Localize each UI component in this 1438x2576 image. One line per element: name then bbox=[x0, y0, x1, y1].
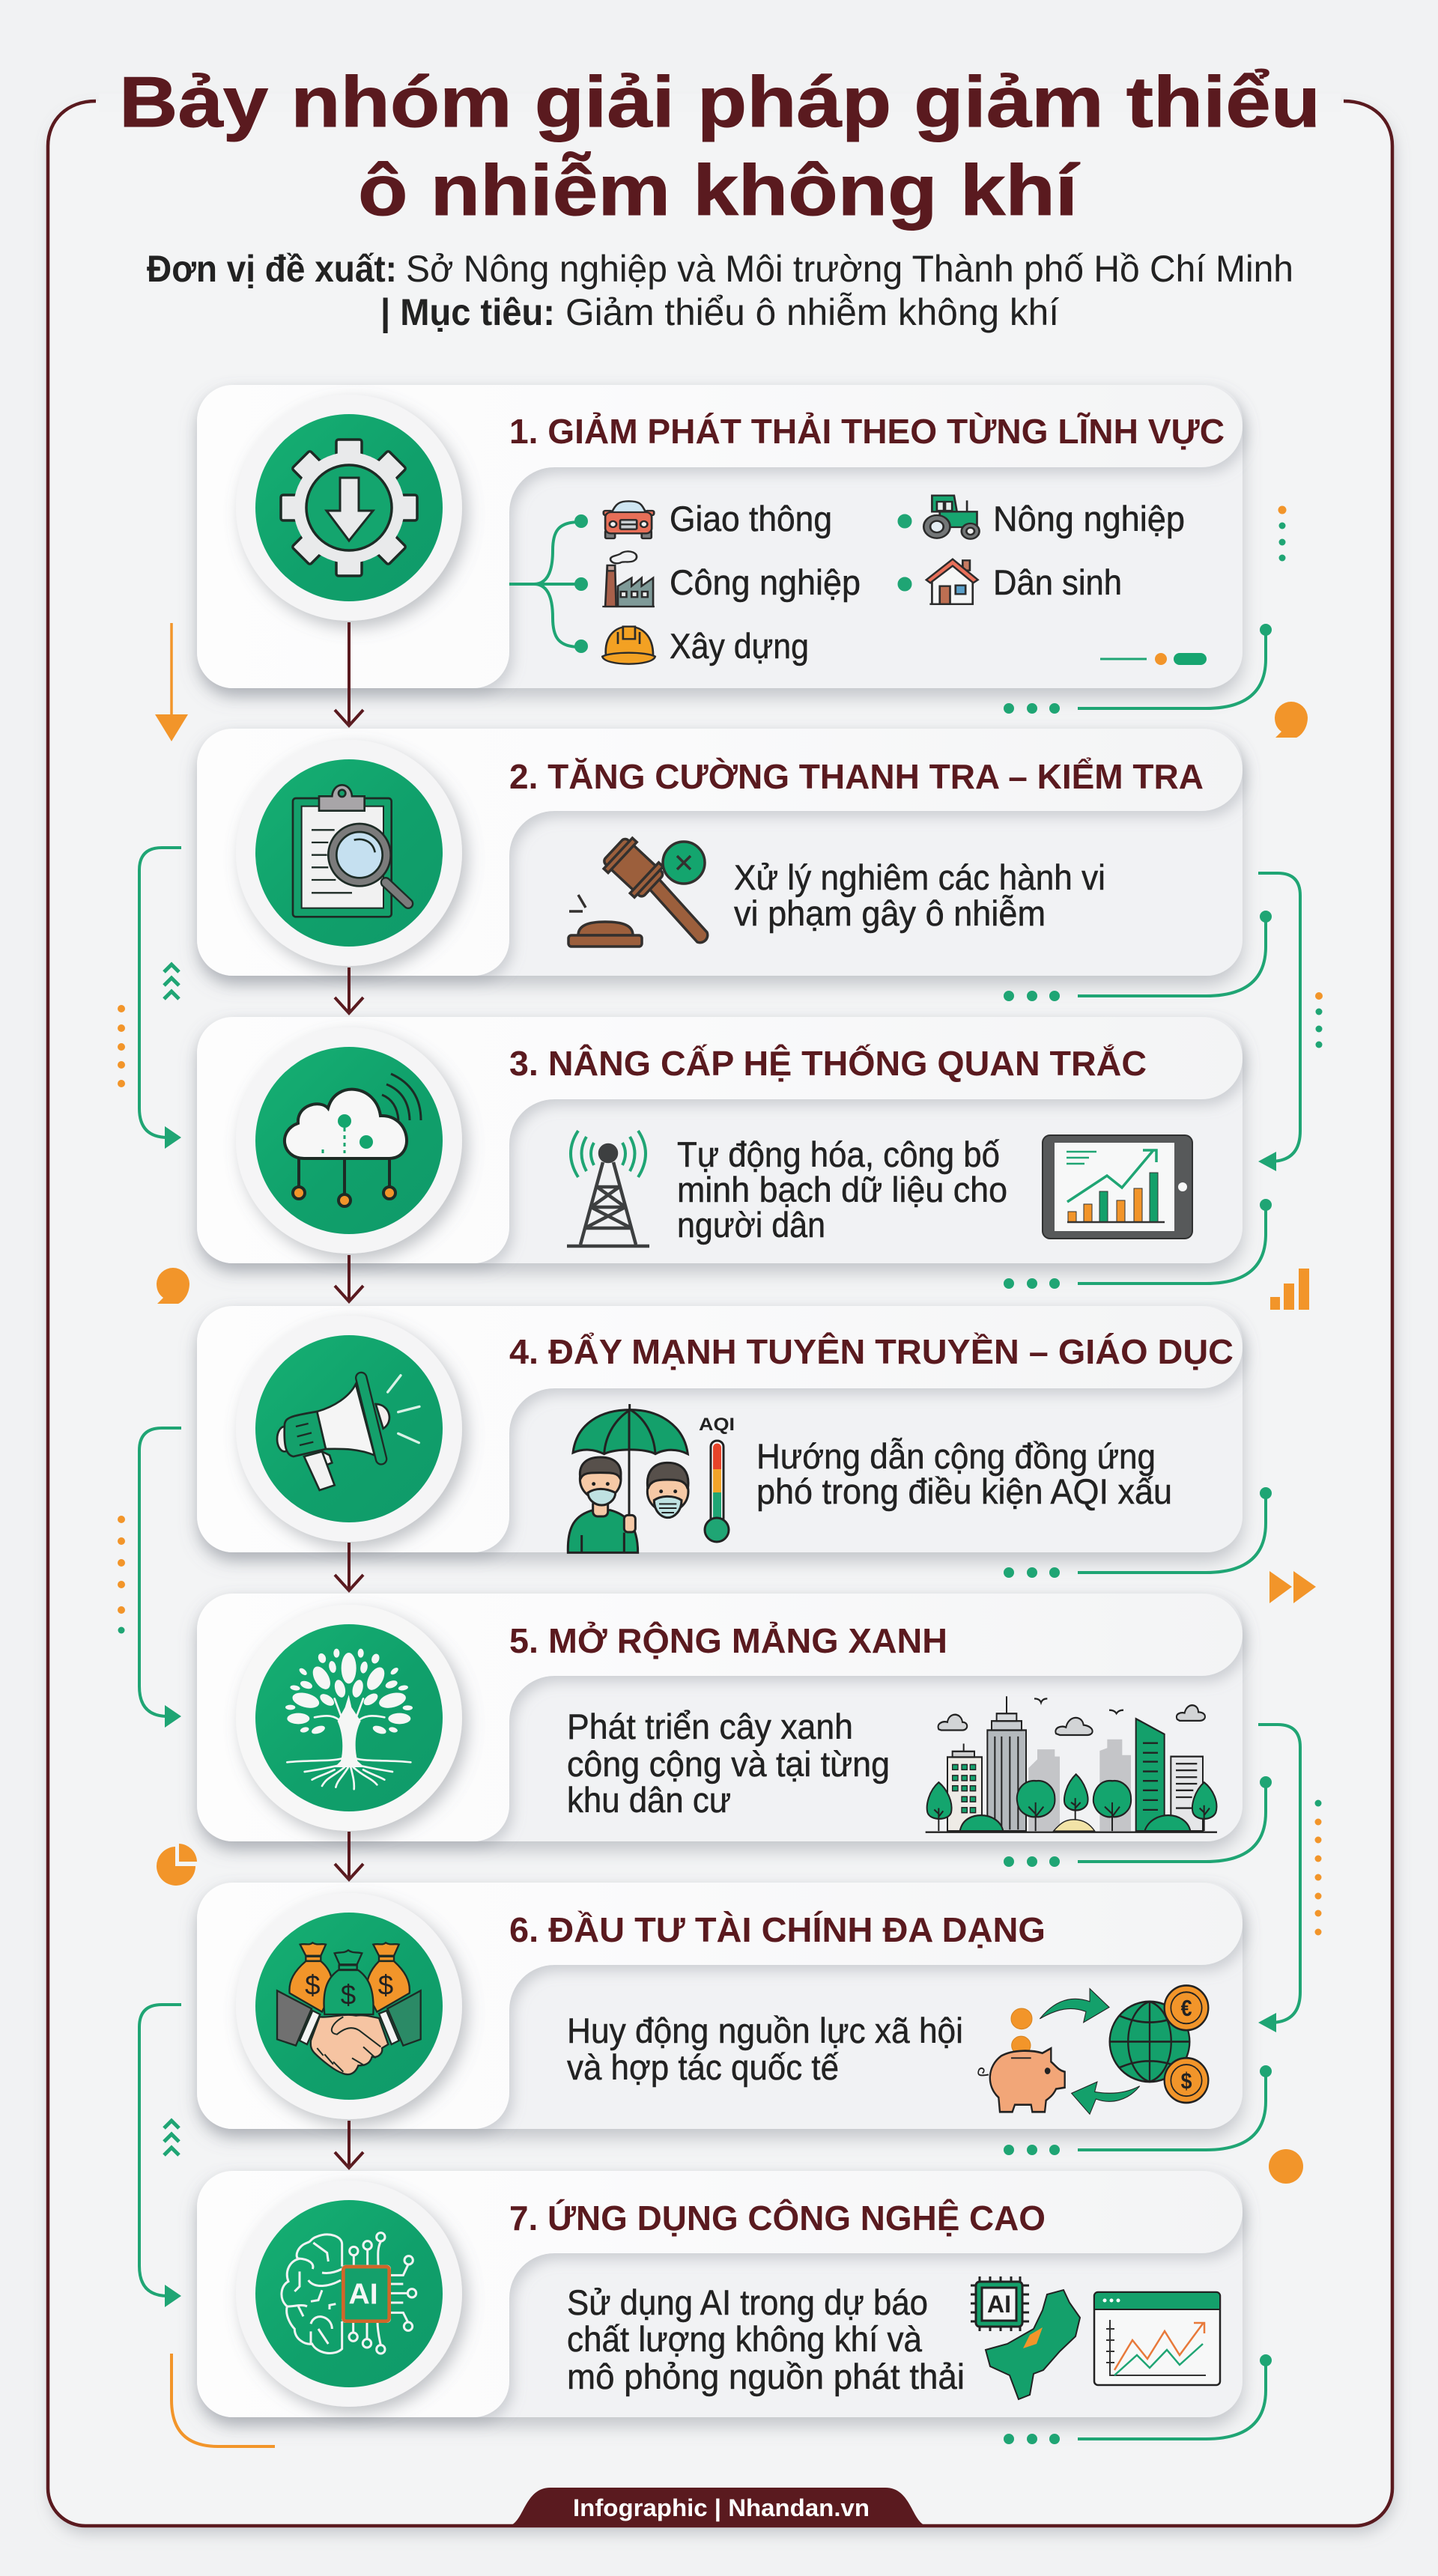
connector right bbox=[1005, 2067, 1270, 2154]
decoration: big orange down arrow bbox=[155, 623, 188, 741]
circle badge: money handshake: $ bbox=[378, 1969, 393, 2000]
title: ô nhiễm không khí bbox=[358, 151, 1081, 231]
icon: factory bbox=[602, 551, 655, 607]
arrow down bbox=[335, 1255, 363, 1301]
panel: step 1 bbox=[197, 385, 1287, 726]
circle badge: gear bbox=[236, 395, 462, 621]
icon: AQI thermometer bbox=[699, 1415, 735, 1542]
icon: tractor bbox=[923, 496, 980, 539]
subtitle: | Mục tiêu: bbox=[380, 291, 555, 334]
icon: map with AI chip bbox=[971, 2276, 1080, 2399]
heading: 6. ĐẦU TƯ TÀI CHÍNH ĐA DẠNG bbox=[509, 1910, 1046, 1949]
panel: step 4 bbox=[197, 1306, 1270, 1591]
heading: 2. TĂNG CƯỜNG THANH TRA – KIỂM TRA bbox=[509, 757, 1204, 796]
body text: Sử dụng AI trong dự báo bbox=[567, 2282, 928, 2322]
circle badge: AI brain bbox=[236, 2181, 462, 2407]
body text: khu dân cư bbox=[567, 1780, 731, 1820]
icons: sector pictograms bbox=[602, 496, 980, 664]
body text: Phát triển cây xanh bbox=[567, 1707, 853, 1746]
icon: orange pie bbox=[157, 1844, 197, 1886]
body text: chất lượng không khí và bbox=[567, 2319, 923, 2359]
icon: car bbox=[604, 501, 654, 538]
arrow down bbox=[335, 1543, 363, 1591]
panel: step 3 bbox=[197, 1017, 1270, 1301]
decoration: dots left bbox=[118, 1516, 125, 1634]
icon: AQI thermometer: AQI bbox=[699, 1415, 735, 1435]
decoration: chevrons up bbox=[164, 965, 179, 999]
subtitle: Sở Nông nghiệp và Môi trường Thành phố Hồ Chí Minh bbox=[406, 248, 1293, 290]
icon: piggy bank globe coins: $ bbox=[1181, 2068, 1192, 2094]
subtitle bbox=[147, 248, 1293, 334]
decoration: orange dots left bbox=[118, 1005, 125, 1087]
body text: vi phạm gây ô nhiễm bbox=[734, 893, 1046, 933]
circle badge: money handshake bbox=[236, 1893, 462, 2119]
panel: step 6 bbox=[197, 1883, 1270, 2168]
body text bbox=[567, 2282, 965, 2396]
footer tab bbox=[509, 2488, 926, 2526]
body text: Tự động hóa, công bố bbox=[677, 1134, 1000, 1174]
decoration: vertical dots bbox=[1278, 506, 1287, 562]
title bbox=[119, 62, 1320, 231]
icon: people under umbrella bbox=[568, 1404, 688, 1552]
body text: Huy động nguồn lực xã hội bbox=[567, 2011, 963, 2050]
icon: piggy bank globe coins bbox=[978, 1985, 1208, 2114]
subtitle: Giảm thiểu ô nhiễm không khí bbox=[565, 291, 1059, 333]
body text bbox=[734, 857, 1105, 933]
icon: tablet chart bbox=[1043, 1135, 1192, 1239]
icon: orange bar chart bbox=[1270, 1269, 1309, 1310]
connector: step 5 to 6 right bbox=[1258, 1725, 1300, 2032]
connector right bbox=[1005, 1489, 1270, 1576]
decoration: chevrons up bbox=[164, 2121, 179, 2155]
body text: và hợp tác quốc tế bbox=[567, 2047, 839, 2087]
connector: step 2 to 3 left bbox=[139, 848, 181, 1149]
connector right bbox=[1005, 1200, 1270, 1287]
icon: helmet bbox=[602, 627, 655, 664]
text: Công nghiệp: Công nghiệp bbox=[670, 562, 861, 602]
heading: 4. ĐẨY MẠNH TUYÊN TRUYỀN – GIÁO DỤC bbox=[509, 1332, 1234, 1371]
connector: step 6 to 7 left bbox=[139, 2005, 181, 2307]
connector right bbox=[1005, 912, 1270, 1000]
icon: chart window bbox=[1094, 2292, 1220, 2385]
icon: map with AI chip: AI bbox=[987, 2291, 1011, 2318]
panel: step 7 bbox=[197, 2171, 1270, 2443]
icon: piggy bank globe coins: € bbox=[1181, 1996, 1192, 2021]
connector: step 4 to 5 left bbox=[139, 1428, 181, 1728]
text: Giao thông: Giao thông bbox=[670, 499, 832, 538]
text: Xây dựng: Xây dựng bbox=[670, 626, 809, 666]
circle badge: money handshake: $ bbox=[305, 1969, 321, 2000]
decoration: dots right bbox=[1315, 992, 1323, 1048]
panel: step 2 bbox=[197, 729, 1270, 1013]
icon: city skyline bbox=[926, 1696, 1217, 1832]
arrow down bbox=[335, 967, 363, 1013]
panel: step 5 bbox=[197, 1594, 1270, 1880]
connector: step 2 to 3 right bbox=[1258, 873, 1300, 1171]
text: Nông nghiệp: Nông nghiệp bbox=[993, 499, 1185, 538]
decoration: dots right bbox=[1315, 1800, 1321, 1935]
footer tab: Infographic | Nhandan.vn bbox=[573, 2494, 870, 2521]
body text bbox=[756, 1436, 1172, 1511]
body text: Xử lý nghiêm các hành vi bbox=[734, 857, 1105, 897]
circle badge: clipboard bbox=[236, 740, 462, 966]
body text bbox=[677, 1134, 1007, 1245]
circle badge: AI brain: AI bbox=[348, 2278, 378, 2311]
body text bbox=[567, 1707, 890, 1820]
connector right bbox=[1005, 625, 1270, 712]
icon: orange double play bbox=[1269, 1571, 1316, 1603]
body text: phó trong điều kiện AQI xấu bbox=[756, 1471, 1172, 1511]
body text bbox=[567, 2011, 963, 2087]
icon: orange circle bbox=[1269, 2149, 1303, 2184]
icon: orange speech bubble bbox=[1275, 702, 1308, 738]
title: Bảy nhóm giải pháp giảm thiểu bbox=[119, 62, 1320, 142]
decoration: orange corner line bbox=[172, 2354, 275, 2446]
body text: mô phỏng nguồn phát thải bbox=[567, 2357, 965, 2396]
heading: 1. GIẢM PHÁT THẢI THEO TỪNG LĨNH VỰC bbox=[509, 412, 1225, 451]
circle badge: cloud bbox=[236, 1027, 462, 1254]
icon: gavel bbox=[568, 834, 708, 947]
circle badge: money handshake: $ bbox=[341, 1980, 356, 2011]
heading: 5. MỞ RỘNG MẢNG XANH bbox=[509, 1621, 947, 1660]
icon: antenna tower bbox=[567, 1131, 649, 1246]
body text: minh bạch dữ liệu cho bbox=[677, 1170, 1007, 1209]
arrow down bbox=[335, 2121, 363, 2168]
heading: 7. ỨNG DỤNG CÔNG NGHỆ CAO bbox=[509, 2199, 1046, 2238]
body text: người dân bbox=[677, 1205, 825, 1245]
text: Dân sinh: Dân sinh bbox=[993, 562, 1122, 602]
circle badge: megaphone bbox=[236, 1316, 462, 1542]
body text: Hướng dẫn cộng đồng ứng bbox=[756, 1436, 1156, 1476]
branching tree connector bbox=[509, 515, 911, 651]
connector right bbox=[1005, 2356, 1270, 2443]
body text: công cộng và tại từng bbox=[567, 1744, 890, 1784]
arrow down bbox=[335, 622, 363, 726]
circle badge: tree bbox=[236, 1605, 462, 1831]
decoration: line dot pill bbox=[1100, 653, 1207, 665]
icon: orange speech bubble bbox=[157, 1268, 189, 1304]
arrow down bbox=[335, 1832, 363, 1880]
heading: 3. NÂNG CẤP HỆ THỐNG QUAN TRẮC bbox=[509, 1044, 1147, 1083]
icon: house bbox=[926, 559, 978, 604]
connector right bbox=[1005, 1778, 1270, 1865]
subtitle: Đơn vị đề xuất: bbox=[147, 248, 397, 290]
